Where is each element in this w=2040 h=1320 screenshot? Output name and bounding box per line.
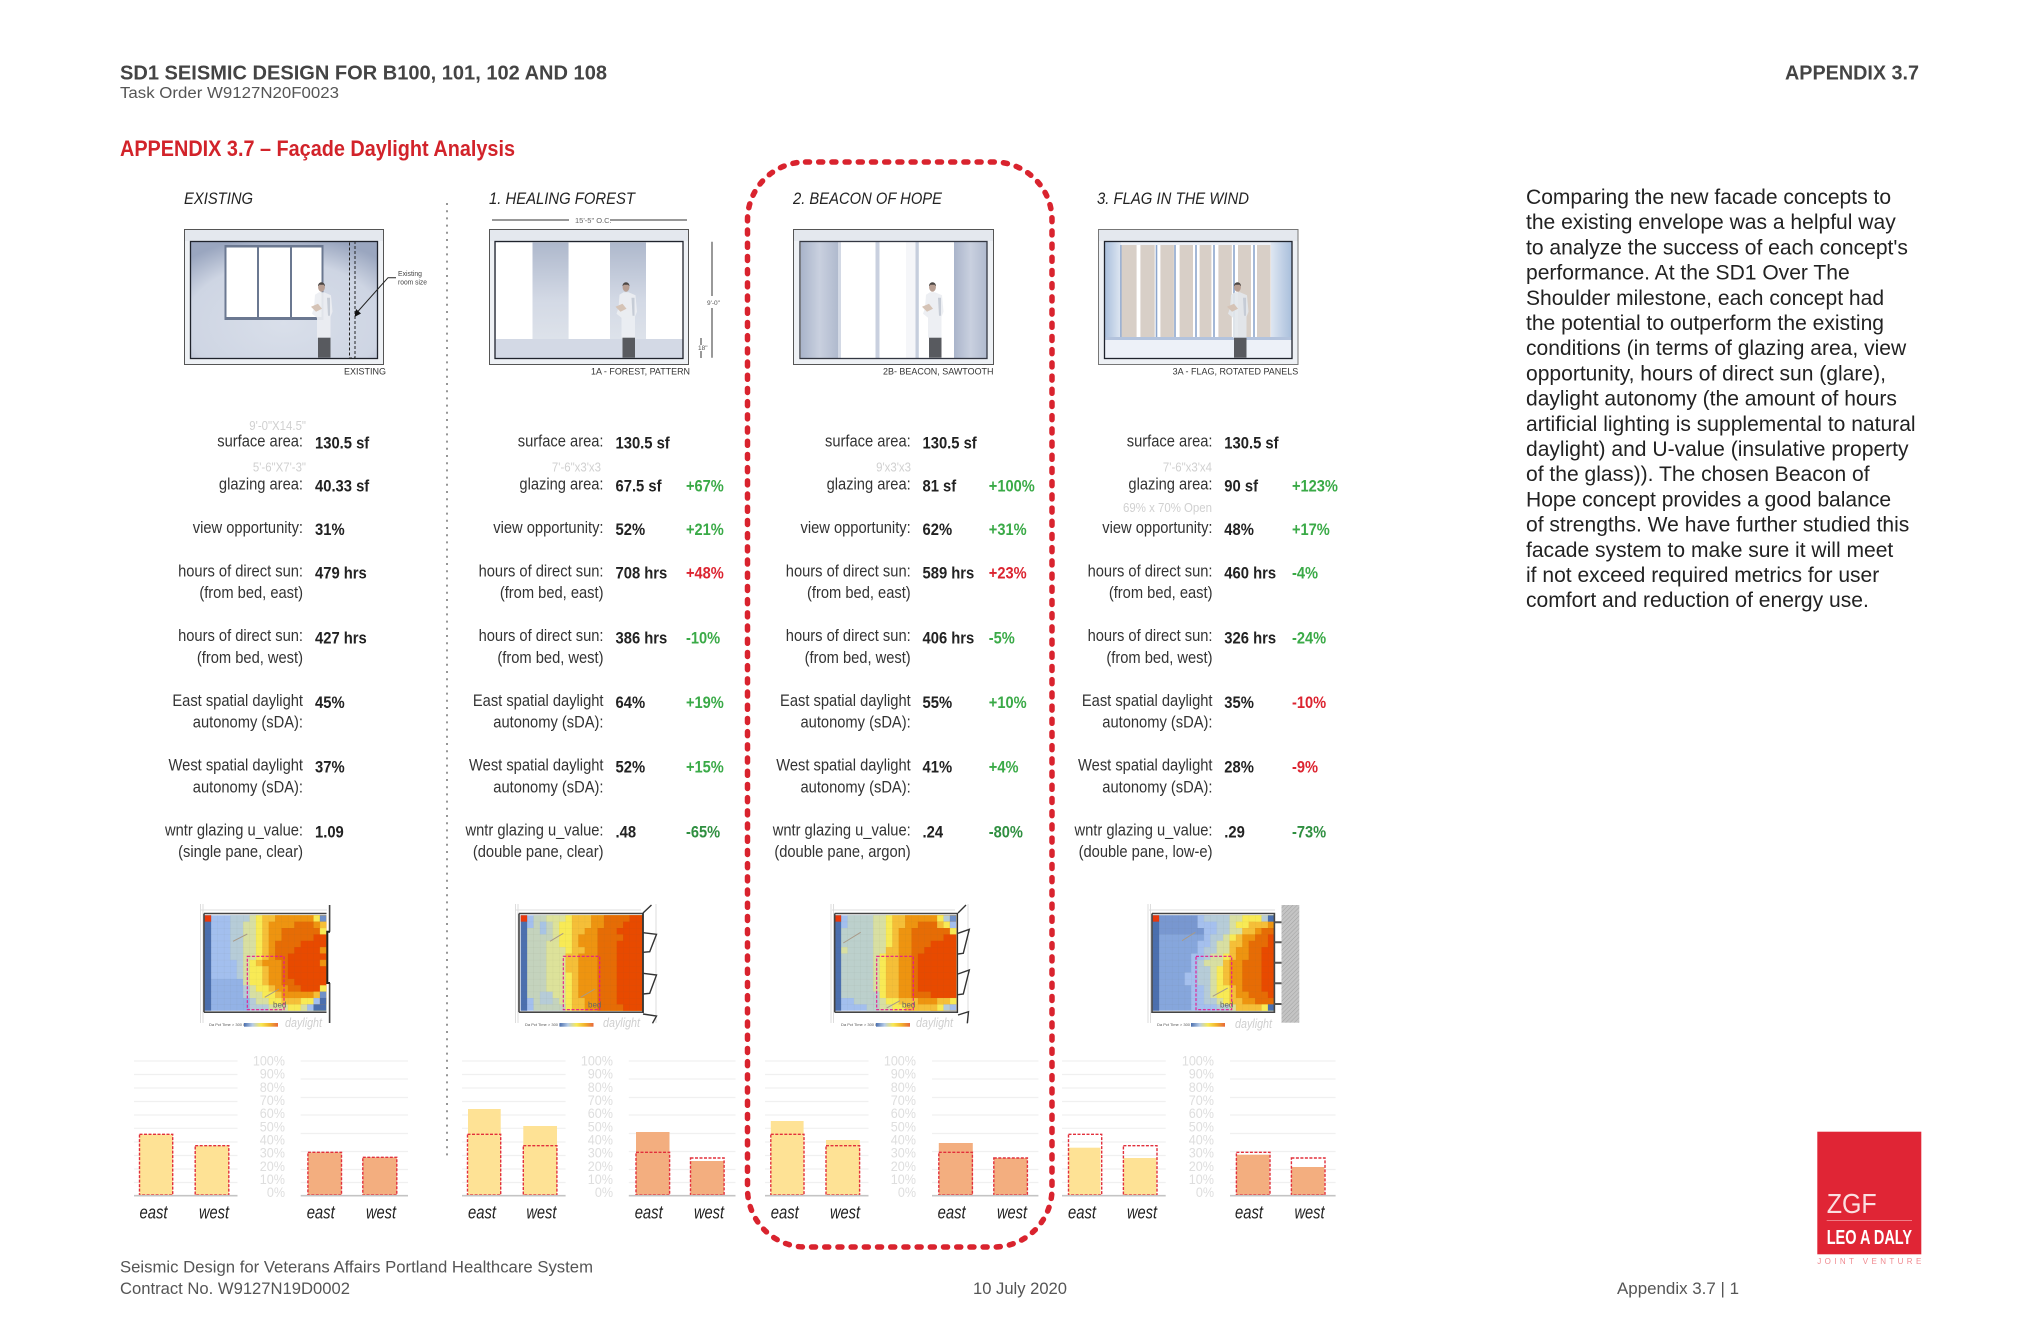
axis percent labels: 90% — [891, 1066, 916, 1082]
metric values: existing: 37% — [315, 759, 345, 777]
metric labels: flag in the wind: wntr glazing u_value: — [1074, 822, 1212, 840]
caption: beacon sawtooth: 2B- BEACON, SAWTOOTH — [883, 367, 994, 378]
metrics: existing — [164, 418, 370, 861]
heatmap: healing forest daylight: Da Pct Time > 300 lux — [525, 1022, 564, 1027]
metric labels: flag in the wind: East spatial daylight — [1082, 692, 1213, 710]
bar labels: east — [1235, 1202, 1264, 1222]
panel: beacon of hope elevation — [792, 189, 994, 378]
annotation: existing room size: room size — [398, 278, 427, 286]
metric values: existing: 31% — [315, 521, 345, 539]
axis percent labels: 50% — [1189, 1119, 1214, 1135]
metric labels: existing: (from bed, east) — [199, 584, 303, 602]
heatmap: flag in the wind daylight: daylight — [1235, 1017, 1272, 1031]
metric labels: healing forest — [465, 432, 604, 861]
logo: ZGF Leo A Daly joint venture: LEO A DALY — [1827, 1227, 1912, 1249]
metric values: healing forest: 52% — [616, 521, 645, 539]
text block: analysis summary: daylight autonomy (the amount of hours — [1526, 388, 1897, 411]
footer: project and contract — [120, 1258, 593, 1298]
metric labels: existing: glazing area: — [219, 476, 303, 494]
metric values: beacon of hope: 130.5 sf — [922, 435, 977, 453]
axis percent labels: 20% — [1189, 1158, 1214, 1174]
metric deltas: healing forest: +21% — [686, 521, 724, 539]
metric values: flag in the wind — [1224, 435, 1279, 842]
heatmap: existing daylight: bed — [273, 1000, 286, 1009]
metric labels: flag in the wind: (from bed, west) — [1106, 649, 1212, 667]
axis percent labels: 0% — [898, 1185, 916, 1200]
bar labels: west — [366, 1202, 397, 1222]
metric deltas: healing forest: +19% — [686, 694, 724, 712]
metric labels: flag in the wind: hours of direct sun: — [1088, 562, 1212, 581]
bar labels: east — [307, 1202, 336, 1222]
dimension notes: flag in the wind: 7'-6"x3'x4 — [1163, 460, 1212, 475]
axis percent labels: 60% — [260, 1106, 285, 1121]
header: project title: Task Order W9127N20F0023 — [120, 85, 339, 102]
metric labels: healing forest: East spatial daylight — [473, 692, 604, 710]
bar labels: east — [468, 1202, 497, 1222]
axis percent labels: 10% — [260, 1171, 285, 1187]
axis percent labels: 80% — [588, 1079, 613, 1095]
axis percent labels: 40% — [260, 1132, 285, 1148]
grid lines — [765, 1061, 1038, 1182]
axis percent labels: 60% — [891, 1106, 916, 1121]
heatmap: beacon of hope daylight — [831, 904, 969, 1030]
text block: analysis summary: facade system to make sure it will meet — [1526, 539, 1893, 562]
direct sun bars: east, west — [636, 1132, 724, 1195]
axis percent labels: 10% — [588, 1171, 613, 1187]
text block: analysis summary: of the glass)). The chosen Beacon of — [1526, 463, 1870, 486]
metric values: flag in the wind: 326 hrs — [1224, 629, 1276, 648]
metric deltas: flag in the wind: -9% — [1292, 759, 1318, 777]
metric labels: beacon of hope: glazing area: — [827, 476, 911, 494]
metric labels: existing: (from bed, west) — [197, 649, 303, 667]
bar labels: east — [771, 1202, 800, 1222]
bar charts: beacon of hope — [765, 1053, 1038, 1222]
metric labels: existing: West spatial daylight — [169, 757, 304, 775]
metric values: existing: 45% — [315, 694, 345, 712]
metric values: flag in the wind: 130.5 sf — [1224, 435, 1279, 453]
metric values: flag in the wind: 48% — [1224, 521, 1254, 539]
heatmap: healing forest daylight: bed — [588, 1000, 601, 1009]
metric labels: beacon of hope: hours of direct sun: — [786, 627, 911, 645]
metric labels: flag in the wind: autonomy (sDA): — [1102, 778, 1212, 797]
column title: beacon of hope: 2. BEACON OF HOPE — [792, 189, 943, 208]
dimension: height and sill: 9'-0" — [707, 300, 721, 307]
metric values: beacon of hope: 81 sf — [922, 478, 957, 496]
axis percent labels: 0% — [595, 1185, 613, 1200]
metric labels: flag in the wind: hours of direct sun: — [1088, 627, 1212, 645]
metric deltas: healing forest: -65% — [686, 824, 720, 842]
axis percent labels: 70% — [1189, 1092, 1214, 1108]
heatmap: healing forest daylight: daylight — [603, 1016, 640, 1030]
axis percent labels: 0% — [267, 1185, 285, 1200]
text block: analysis summary: comfort and reduction of energy use. — [1526, 589, 1869, 612]
metric values: beacon of hope: 41% — [922, 759, 952, 777]
axis percent labels: 20% — [588, 1158, 613, 1174]
metric deltas: beacon of hope: +4% — [989, 759, 1018, 777]
icon: doctor figure — [311, 282, 332, 358]
footer: project and contract: Seismic Design for Veterans Affairs Portland Healthcare System — [120, 1258, 593, 1276]
metric labels: healing forest: (from bed, west) — [497, 649, 604, 667]
heatmap: existing daylight — [200, 904, 330, 1030]
bar labels: east — [635, 1202, 664, 1222]
metric labels: flag in the wind: autonomy (sDA): — [1102, 714, 1212, 732]
metric labels: existing: (single pane, clear) — [178, 843, 303, 861]
dimension: top span: 15'-5" O.C. — [575, 216, 612, 225]
metric labels: healing forest: wntr glazing u_value: — [465, 822, 604, 840]
metric labels: healing forest: autonomy (sDA): — [493, 778, 604, 797]
axis percent labels: 70% — [260, 1092, 285, 1108]
metrics: healing forest — [465, 432, 724, 861]
icon: doctor figure — [616, 282, 637, 358]
axis percent labels: 40% — [1189, 1132, 1214, 1148]
logo: ZGF Leo A Daly joint venture: JOINT VENTURE — [1817, 1257, 1921, 1266]
bar labels — [771, 1202, 1028, 1222]
dimension notes: flag in the wind — [1123, 460, 1212, 515]
bar labels — [468, 1202, 725, 1222]
text block: analysis summary: daylight) and U-value (insulative property — [1526, 438, 1909, 461]
text block: analysis summary: to analyze the success of each concept's — [1526, 236, 1908, 259]
axis percent labels: 0% — [1196, 1185, 1214, 1200]
grid lines — [462, 1061, 736, 1182]
axis percent labels: 90% — [588, 1066, 613, 1082]
metric values: healing forest: 708 hrs — [616, 565, 667, 583]
metric values: healing forest: 130.5 sf — [616, 435, 670, 453]
caption: existing: EXISTING — [344, 367, 386, 378]
metric labels: beacon of hope: surface area: — [825, 432, 911, 451]
heatmap: beacon of hope daylight: Da Pct Time > 300 lux — [841, 1022, 880, 1027]
dimension notes: existing: 5'-6"X7'-3" — [253, 460, 306, 475]
text block: analysis summary: the existing envelope was a helpful way — [1526, 211, 1896, 234]
axis percent labels: 30% — [891, 1145, 916, 1161]
metric deltas: healing forest: +67% — [686, 478, 724, 496]
heatmap: beacon of hope daylight: bed — [902, 1000, 915, 1009]
metric values: beacon of hope: 406 hrs — [922, 629, 974, 648]
metric labels: beacon of hope: hours of direct sun: — [786, 562, 911, 581]
heatmap: existing daylight: Da Pct Time > 300 lux — [209, 1022, 248, 1027]
metric values: flag in the wind: 28% — [1224, 759, 1254, 777]
metric labels: flag in the wind: (from bed, east) — [1109, 584, 1212, 602]
callout: red dashed highlight around Beacon of Hope — [748, 162, 1052, 1247]
axis percent labels: 50% — [588, 1119, 613, 1135]
bar labels: east — [1068, 1202, 1097, 1222]
metric values: existing: 40.33 sf — [315, 478, 370, 496]
axis percent labels: 60% — [1189, 1106, 1214, 1121]
bar charts: healing forest — [462, 1053, 736, 1222]
metric values: beacon of hope: 62% — [922, 521, 952, 539]
dimension note: beacon of hope: 9'x3'x3 — [876, 460, 911, 475]
metric labels: healing forest: hours of direct sun: — [479, 562, 604, 581]
axis percent labels: 10% — [891, 1171, 916, 1187]
metric labels: existing — [164, 432, 304, 861]
bar labels: east — [938, 1202, 966, 1222]
axis percent labels: 100% — [884, 1053, 916, 1069]
header: appendix number: APPENDIX 3.7 — [1785, 62, 1919, 84]
metric labels: flag in the wind: surface area: — [1127, 432, 1212, 451]
heatmap: flag in the wind daylight — [1148, 904, 1299, 1031]
axis percent labels: 70% — [588, 1092, 613, 1108]
icon: doctor figure — [1227, 282, 1248, 358]
axis percent labels: 50% — [260, 1119, 285, 1135]
caption: flag rotated panels: 3A - FLAG, ROTATED PANELS — [1173, 367, 1298, 378]
panel: healing forest elevation — [489, 189, 721, 378]
metrics: beacon of hope — [772, 432, 1035, 861]
metric labels: healing forest: view opportunity: — [493, 519, 604, 537]
bar labels: west — [997, 1202, 1028, 1222]
axis percent labels: 80% — [260, 1079, 285, 1095]
axis percent labels: 80% — [1189, 1079, 1214, 1095]
dimension notes: existing: 9'-0"X14.5" — [249, 418, 306, 433]
metric labels: existing: hours of direct sun: — [178, 562, 303, 581]
metric labels: beacon of hope: view opportunity: — [800, 519, 911, 537]
metric deltas: beacon of hope: +10% — [989, 694, 1027, 712]
bar labels: west — [830, 1202, 861, 1222]
metric deltas: healing forest: +15% — [686, 759, 724, 777]
metric labels: existing: autonomy (sDA): — [193, 714, 303, 732]
footer: date: 10 July 2020 — [973, 1280, 1067, 1298]
metric deltas: beacon of hope: -5% — [989, 629, 1015, 648]
metrics: flag in the wind — [1074, 432, 1338, 861]
elevation drawing: existing — [184, 230, 427, 364]
sDA bars: east, west — [468, 1109, 557, 1195]
metric labels: healing forest: (from bed, east) — [500, 584, 604, 602]
metric values: flag in the wind: 35% — [1224, 694, 1254, 712]
metric labels: existing: wntr glazing u_value: — [164, 822, 303, 840]
metric values: healing forest: .48 — [616, 824, 636, 842]
axis percent labels: 100% — [253, 1053, 285, 1069]
direct sun bars: east, west — [1236, 1152, 1325, 1195]
axis percent labels: 60% — [588, 1106, 613, 1121]
metric labels: beacon of hope: (from bed, west) — [805, 649, 911, 667]
metric values: beacon of hope: .24 — [922, 824, 943, 842]
metric labels: beacon of hope: (from bed, east) — [807, 584, 911, 602]
bar labels: west — [1294, 1202, 1325, 1222]
metric labels: flag in the wind — [1074, 432, 1213, 861]
metric deltas: flag in the wind: -4% — [1292, 564, 1318, 583]
heatmap: healing forest daylight — [516, 904, 656, 1030]
metric values: healing forest: 67.5 sf — [616, 478, 662, 496]
metric deltas: flag in the wind — [1292, 478, 1338, 842]
caption: forest pattern: 1A - FOREST, PATTERN — [591, 367, 690, 378]
axis percent labels: 90% — [1189, 1066, 1214, 1082]
metric values: flag in the wind: .29 — [1224, 824, 1245, 842]
elevation drawing: healing forest — [490, 230, 688, 364]
axis percent labels: 100% — [1182, 1053, 1214, 1069]
metric deltas: flag in the wind: +123% — [1292, 478, 1338, 496]
metric labels: beacon of hope: (double pane, argon) — [774, 843, 911, 861]
metric labels: healing forest: (double pane, clear) — [473, 843, 604, 861]
column title: flag in the wind: 3. FLAG IN THE WIND — [1097, 189, 1249, 208]
metric labels: existing: view opportunity: — [193, 519, 303, 537]
bar charts: flag in the wind — [1062, 1053, 1336, 1222]
metric values: beacon of hope: 55% — [922, 694, 952, 712]
axis percent labels: 80% — [891, 1079, 916, 1095]
icon: doctor figure — [922, 282, 944, 358]
bar labels: west — [694, 1202, 725, 1222]
column title: healing forest: 1. HEALING FOREST — [489, 189, 636, 208]
metric deltas: beacon of hope — [989, 478, 1035, 842]
direct sun bars: east, west — [939, 1143, 1027, 1195]
footer: page number: Appendix 3.7 | 1 — [1617, 1280, 1739, 1298]
metric labels: beacon of hope: wntr glazing u_value: — [772, 822, 911, 840]
dimension: height and sill: 18" — [698, 345, 708, 352]
axis percent labels: 40% — [891, 1132, 916, 1148]
metric labels: existing: autonomy (sDA): — [193, 778, 303, 797]
text block: analysis summary: performance. At the SD1 Over The — [1526, 262, 1850, 285]
annotation: existing room size: Existing — [398, 269, 422, 278]
metric values: beacon of hope — [922, 435, 977, 842]
metric labels: flag in the wind: West spatial daylight — [1078, 757, 1213, 775]
dimension notes: flag in the wind: 69% x 70% Open — [1123, 500, 1212, 515]
bar labels: east — [140, 1202, 168, 1222]
logo: ZGF Leo A Daly joint venture — [1817, 1132, 1921, 1266]
metric deltas: flag in the wind: -24% — [1292, 629, 1326, 648]
heading: facade daylight analysis: APPENDIX 3.7 – Façade Daylight Analysis — [120, 136, 515, 161]
axis percent labels: 70% — [891, 1092, 916, 1108]
grid lines — [134, 1061, 408, 1182]
axis percent labels: 10% — [1189, 1171, 1214, 1187]
bar labels: west — [199, 1202, 230, 1222]
metric values: healing forest: 64% — [616, 694, 645, 712]
metric values: flag in the wind: 460 hrs — [1224, 565, 1276, 583]
metric labels: healing forest: glazing area: — [519, 476, 604, 494]
elevation drawing: beacon — [794, 230, 994, 364]
arrow: existing room size pointer — [354, 278, 396, 317]
divider: dotted line between existing and concepts — [446, 203, 448, 1157]
header: project title — [120, 62, 607, 102]
metric labels: beacon of hope: East spatial daylight — [780, 692, 911, 710]
heatmap: beacon of hope daylight: daylight — [916, 1016, 953, 1030]
sDA bars: east, west — [140, 1134, 229, 1195]
metric deltas: healing forest: -10% — [686, 629, 720, 648]
dimension notes: existing — [249, 418, 306, 475]
heatmap: existing daylight: daylight — [285, 1016, 322, 1030]
metric labels: beacon of hope: autonomy (sDA): — [801, 778, 911, 797]
metric labels: existing: East spatial daylight — [172, 692, 304, 710]
axis percent labels: 100% — [581, 1053, 613, 1069]
bar labels — [1068, 1202, 1325, 1222]
metric labels: healing forest: West spatial daylight — [469, 757, 604, 775]
header: project title: SD1 SEISMIC DESIGN FOR B100, 101, 102 AND 108 — [120, 62, 607, 84]
bar labels — [140, 1202, 397, 1222]
sDA bars: east, west — [1068, 1134, 1157, 1195]
metric values: existing: 479 hrs — [315, 565, 367, 583]
axis percent labels: 30% — [260, 1145, 285, 1161]
text block: analysis summary: of strengths. We have further studied this — [1526, 514, 1909, 537]
direct sun bars: east, west — [308, 1152, 397, 1195]
text block: analysis summary: artificial lighting is supplemental to natural — [1526, 413, 1916, 436]
text block: analysis summary: Shoulder milestone, each concept had — [1526, 287, 1884, 310]
footer: project and contract: Contract No. W9127N19D0002 — [120, 1280, 350, 1298]
text block: analysis summary: Hope concept provides a good balance — [1526, 488, 1891, 511]
metric deltas: healing forest: +48% — [686, 564, 724, 583]
axis percent labels: 30% — [588, 1145, 613, 1161]
panel: existing elevation — [184, 189, 427, 378]
metric values: healing forest — [616, 435, 670, 842]
elevation drawing: flag — [1098, 230, 1298, 364]
panel: flag in the wind elevation — [1097, 189, 1298, 378]
axis percent labels: 20% — [260, 1158, 285, 1174]
bar labels: west — [1127, 1202, 1158, 1222]
bar charts: existing — [134, 1053, 408, 1222]
metric labels: flag in the wind: glazing area: — [1128, 476, 1212, 494]
axis percent labels: 20% — [891, 1158, 916, 1174]
axis percent labels: 40% — [588, 1132, 613, 1148]
text block: analysis summary: Comparing the new facade concepts to — [1526, 186, 1891, 209]
metric deltas: beacon of hope: +100% — [989, 478, 1035, 496]
sDA bars: east, west — [771, 1121, 860, 1195]
metric deltas: flag in the wind: -10% — [1292, 694, 1326, 712]
metric deltas: healing forest — [686, 478, 724, 842]
metric values: existing: 130.5 sf — [315, 435, 370, 453]
metric labels: existing: hours of direct sun: — [178, 627, 303, 645]
text block: analysis summary: if not exceed required metrics for user — [1526, 564, 1879, 587]
metric labels: healing forest: autonomy (sDA): — [493, 714, 604, 732]
metric deltas: flag in the wind: +17% — [1292, 521, 1330, 539]
metric labels: healing forest: hours of direct sun: — [479, 627, 604, 645]
dimension note: healing forest: 7'-6"x3'x3 — [552, 460, 601, 475]
metric values: flag in the wind: 90 sf — [1224, 478, 1259, 496]
metric labels: healing forest: surface area: — [518, 432, 604, 451]
metric values: existing: 1.09 — [315, 824, 344, 842]
metric values: beacon of hope: 589 hrs — [922, 565, 974, 583]
axis percent labels: 90% — [260, 1066, 285, 1082]
metric deltas: beacon of hope: -80% — [989, 824, 1023, 842]
metric values: existing: 427 hrs — [315, 629, 367, 648]
metric values: existing — [315, 435, 370, 842]
heatmap: flag in the wind daylight: Da Pct Time > 300 lux — [1157, 1022, 1196, 1027]
text block: analysis summary: conditions (in terms of glazing area, view — [1526, 337, 1907, 360]
axis percent labels: 50% — [891, 1119, 916, 1135]
metric labels: beacon of hope: autonomy (sDA): — [801, 714, 911, 732]
column title: existing: EXISTING — [184, 189, 253, 208]
grid lines — [1062, 1061, 1336, 1182]
text block: analysis summary: the potential to outperform the existing — [1526, 312, 1884, 335]
metric labels: beacon of hope — [772, 432, 911, 861]
dimension: height and sill — [698, 242, 721, 358]
metric labels: existing: surface area: — [217, 432, 303, 451]
axis percent labels: 30% — [1189, 1145, 1214, 1161]
metric labels: flag in the wind: (double pane, low-e) — [1079, 843, 1212, 861]
metric deltas: beacon of hope: +23% — [989, 564, 1027, 583]
logo: ZGF Leo A Daly joint venture: ZGF — [1827, 1188, 1877, 1219]
metric labels: beacon of hope: West spatial daylight — [776, 757, 911, 775]
metric labels: flag in the wind: view opportunity: — [1102, 519, 1212, 537]
metric deltas: beacon of hope: +31% — [989, 521, 1027, 539]
text block: analysis summary: opportunity, hours of direct sun (glare), — [1526, 362, 1886, 385]
metric deltas: flag in the wind: -73% — [1292, 824, 1326, 842]
metric values: healing forest: 52% — [616, 759, 645, 777]
bar labels: west — [526, 1202, 557, 1222]
metric values: healing forest: 386 hrs — [616, 629, 667, 648]
heatmap: flag in the wind daylight: bed — [1220, 1000, 1233, 1009]
